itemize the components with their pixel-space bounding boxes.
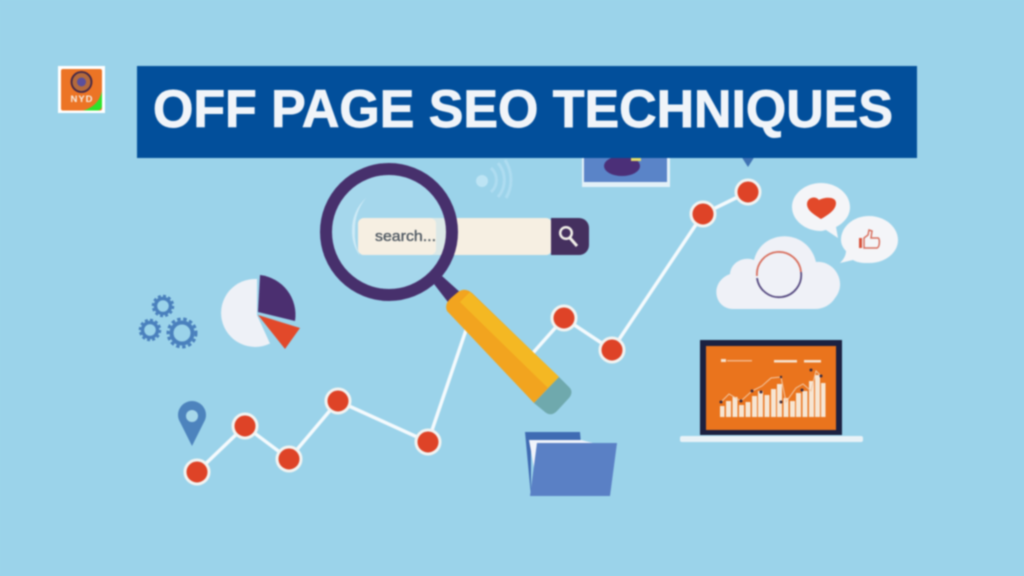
- magnifying glass: [326, 169, 572, 414]
- search placeholder text: search...: [375, 229, 436, 245]
- trend line on screen: [721, 371, 821, 402]
- icon: location pin: [178, 401, 206, 446]
- pie chart: [221, 275, 300, 349]
- title: OFF PAGE SEO TECHNIQUES: [153, 80, 893, 139]
- speech bubble: thumbs up: [840, 216, 898, 263]
- laptop: [680, 340, 863, 442]
- ring: [326, 169, 452, 295]
- line chart: data points: [185, 180, 760, 484]
- line chart: connector lines: [197, 330, 466, 472]
- search button: [551, 218, 589, 255]
- speech bubble: heart: [792, 183, 850, 238]
- title banner: [137, 66, 917, 158]
- line chart: right connector lines: [532, 192, 748, 354]
- screen header bars: [721, 359, 821, 362]
- neck: [434, 276, 462, 306]
- pie: large white slice: [221, 279, 270, 347]
- icon: gears: [140, 296, 196, 347]
- trend markers: [720, 368, 822, 404]
- laptop screen: [706, 346, 836, 430]
- pie: red slice: [258, 315, 300, 349]
- laptop frame: [700, 340, 842, 435]
- icon: wifi signal: [476, 160, 511, 198]
- handle cap: [534, 377, 572, 414]
- icon: search glass in button: [560, 227, 577, 246]
- icon: cloud with sync ring: [716, 236, 840, 309]
- icon: folder: [525, 432, 617, 496]
- lens: [326, 169, 452, 295]
- icon: small map pin under banner: [741, 156, 755, 167]
- bar chart on screen: [720, 375, 826, 417]
- pie: purple slice: [258, 275, 295, 321]
- logo: NYD badge: [58, 66, 105, 113]
- logo: NYD badge: NYD: [70, 94, 94, 105]
- photo card behind banner: [582, 150, 670, 187]
- handle: [446, 290, 559, 403]
- laptop base: [680, 436, 863, 442]
- sync ring: [757, 252, 801, 276]
- search bar: [358, 218, 589, 255]
